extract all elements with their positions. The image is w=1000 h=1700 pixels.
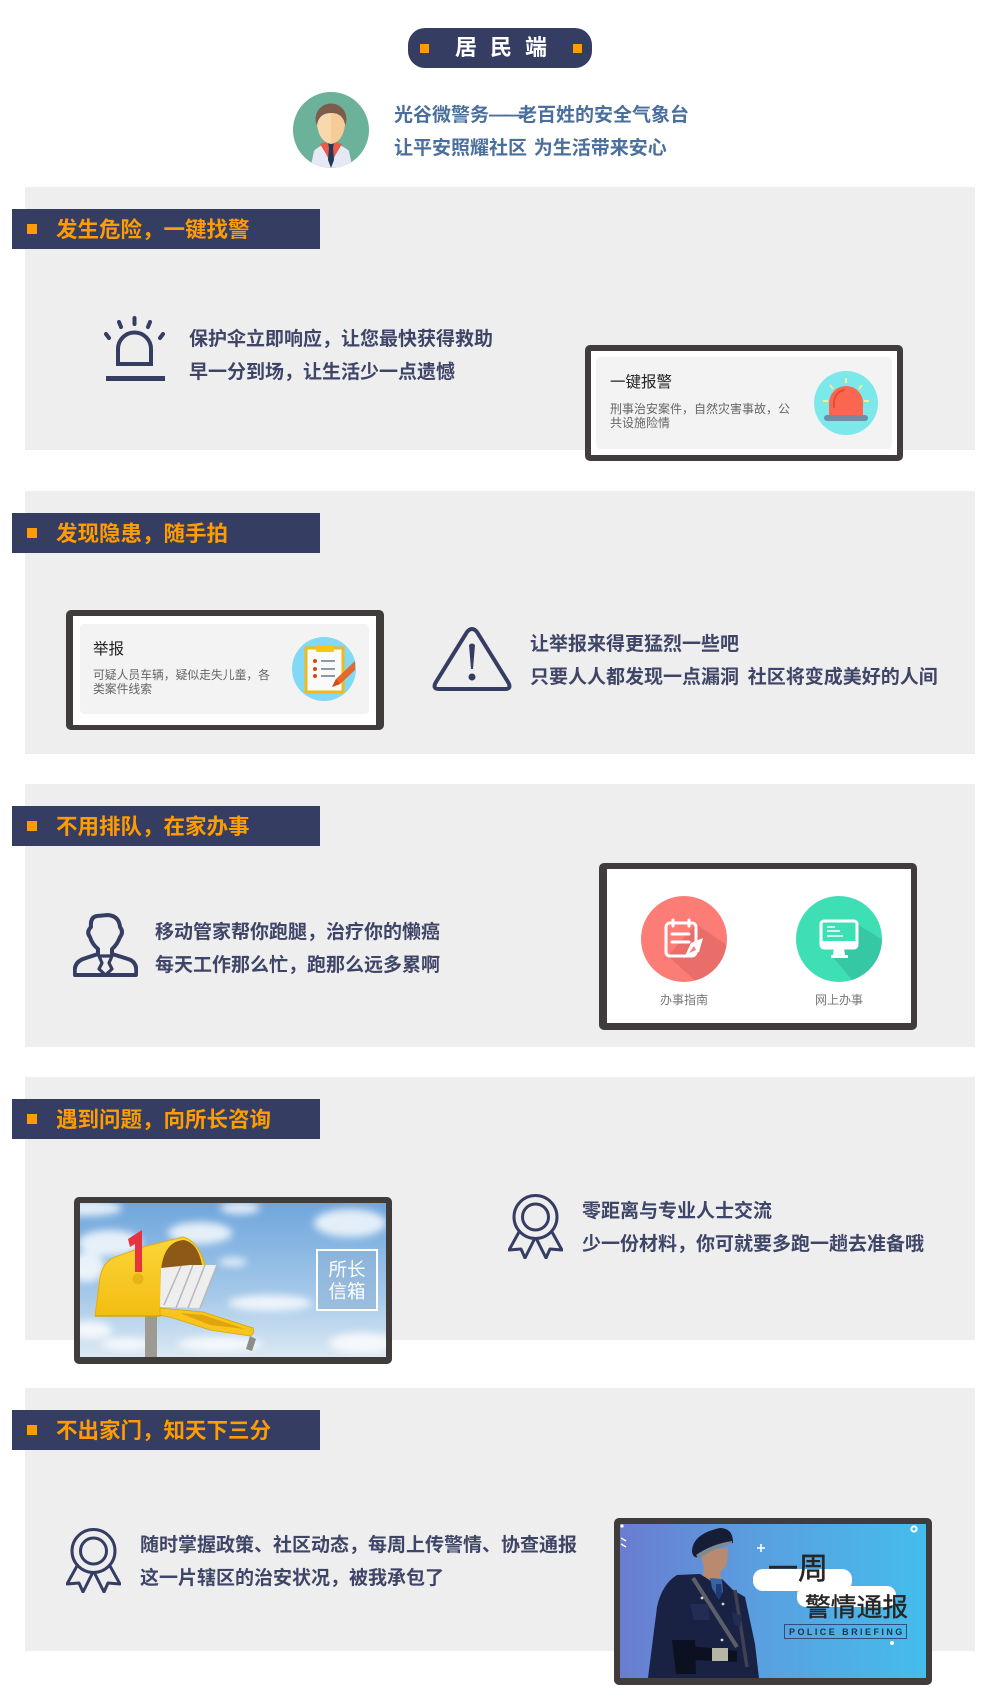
card description: 刑事治安案件，自然灾害事故，公 — [610, 402, 790, 416]
heading — [12, 1410, 320, 1450]
badge: 信箱 — [328, 1281, 366, 1302]
title pill: 居民端 — [408, 28, 592, 68]
card description — [610, 402, 790, 430]
badge — [317, 1250, 377, 1310]
panel: 发生危险，一键找警 — [12, 187, 975, 461]
icon: red siren — [814, 371, 878, 435]
banner: 一周警情通报: 警情通报 — [805, 1593, 908, 1622]
icon: avatar — [293, 92, 369, 168]
banner: 一周警情通报: 一周 — [768, 1553, 828, 1586]
text block — [530, 634, 938, 688]
banner: 一周警情通报: POLICE BRIEFING — [789, 1627, 905, 1637]
heading: 遇到问题，向所长咨询 — [56, 1108, 271, 1132]
text block: 让举报来得更猛烈一些吧 — [530, 634, 739, 654]
card description: 可疑人员车辆，疑似走失儿童，各 — [93, 668, 270, 682]
icon: 网上办事 — [796, 896, 882, 982]
text block: 每天工作那么忙，跑那么远多累啊 — [155, 954, 440, 976]
text block: 移动管家帮你跑腿，治疗你的懒癌 — [155, 922, 440, 942]
text block: 只要人人都发现一点漏洞 社区将变成美好的人间 — [530, 666, 938, 688]
text block: 零距离与专业人士交流 — [582, 1200, 772, 1222]
panel: 发现隐患，随手拍 — [12, 491, 975, 754]
card title: 一键报警 — [610, 374, 672, 391]
officer — [648, 1528, 759, 1678]
text block: 这一片辖区的治安状况，被我承包了 — [140, 1568, 444, 1588]
icon: person — [73, 913, 138, 977]
text block — [582, 1200, 924, 1254]
panel: 遇到问题，向所长咨询 — [12, 1077, 975, 1364]
text block: 早一分到场，让生活少一点遗憾 — [189, 362, 455, 382]
icon: clipboard and pencil — [292, 637, 356, 701]
intro text: 让平安照耀社区 为生活带来安心 — [394, 138, 667, 158]
panel: 不出家门，知天下三分 — [12, 1388, 975, 1685]
heading — [12, 513, 320, 553]
heading: 不出家门，知天下三分 — [56, 1419, 271, 1443]
icon: medal — [508, 1194, 563, 1259]
title pill: 居民端: 居民端 — [455, 35, 560, 60]
card: 举报 — [66, 610, 384, 730]
label: 办事指南 — [660, 993, 708, 1007]
label: 网上办事 — [815, 993, 863, 1007]
card: mailbox photo — [74, 1197, 392, 1364]
heading — [12, 1099, 320, 1139]
card description: 共设施险情 — [610, 416, 670, 430]
card title: 举报 — [93, 641, 124, 658]
text block: 随时掌握政策、社区动态，每周上传警情、协查通报 — [140, 1534, 577, 1556]
icon: 办事指南 — [641, 896, 727, 982]
photo: yellow mailbox with sky — [80, 1203, 386, 1357]
banner: 一周警情通报 — [620, 1524, 926, 1678]
intro text — [394, 104, 689, 158]
card: 一键报警 — [585, 345, 903, 461]
heading: 发现隐患，随手拍 — [56, 522, 228, 546]
card description: 类案件线索 — [93, 682, 152, 696]
panel: 不用排队，在家办事 — [12, 784, 975, 1047]
text block: 少一份材料，你可就要多跑一趟去准备哦 — [582, 1234, 924, 1254]
text block — [140, 1534, 577, 1588]
heading — [12, 209, 320, 249]
text block — [155, 922, 440, 976]
card description — [93, 668, 270, 696]
text block: 保护伞立即响应，让您最快获得救助 — [189, 328, 493, 350]
heading: 发生危险，一键找警 — [56, 218, 250, 242]
text block — [189, 328, 493, 382]
icon: alarm bell — [104, 316, 165, 381]
heading — [12, 806, 320, 846]
intro text: 光谷微警务——老百姓的安全气象台 — [394, 104, 689, 126]
card: police briefing banner — [614, 1518, 932, 1685]
badge: 所长 — [328, 1259, 366, 1280]
icon: warning triangle — [432, 627, 512, 691]
card: service icons — [599, 863, 917, 1030]
icon: medal — [66, 1528, 121, 1593]
heading: 不用排队，在家办事 — [56, 815, 250, 839]
